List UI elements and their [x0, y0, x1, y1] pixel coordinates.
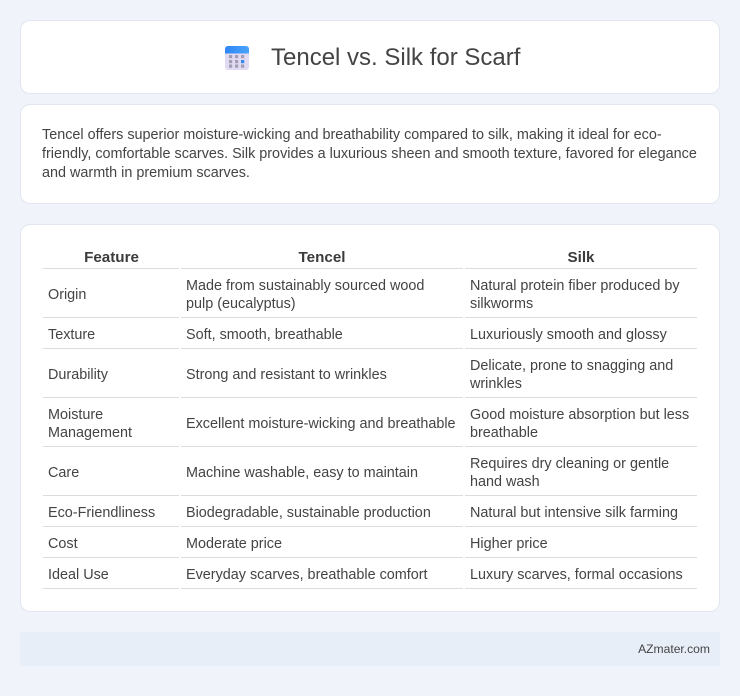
row: Moisture Management: Moisture: [48, 407, 103, 423]
row: Ideal Use: Ideal Use: [48, 567, 109, 583]
column heading: Tencel: Tencel: [298, 249, 346, 266]
row: Origin: Origin: [48, 287, 86, 303]
row: Durability: Durability: [48, 367, 108, 383]
summary text: friendly, comfortable scarves. Silk provides a luxurious sheen and smooth texture, favored for elegance: [42, 146, 697, 162]
title: Tencel vs. Silk for Scarf: [271, 44, 520, 71]
row: Texture: Texture: [48, 327, 95, 343]
text: hand wash: [470, 474, 540, 490]
row: Care: Care: [48, 465, 79, 481]
header panel: [20, 20, 720, 94]
text: Soft, smooth, breathable: [186, 327, 343, 343]
text: Luxury scarves, formal occasions: [470, 567, 683, 583]
summary text: Tencel offers superior moisture-wicking and breathability compared to silk, making it ideal for eco-: [42, 127, 662, 143]
text: Luxuriously smooth and glossy: [470, 327, 667, 343]
icon: calendar: [225, 46, 249, 70]
text: Natural but intensive silk farming: [470, 505, 678, 521]
row: Moisture Management: Management: [48, 425, 132, 441]
text: Moderate price: [186, 536, 282, 552]
text: Strong and resistant to wrinkles: [186, 367, 387, 383]
text: Machine washable, easy to maintain: [186, 465, 418, 481]
text: Delicate, prone to snagging and: [470, 358, 673, 374]
text: breathable: [470, 425, 538, 441]
text: wrinkles: [470, 376, 522, 392]
row: Moisture Management: [48, 407, 132, 441]
footer text: AZmater.com: [638, 642, 710, 656]
column heading: Silk: Silk: [567, 249, 595, 266]
footer bar: [20, 632, 720, 666]
text: silkworms: [470, 296, 533, 312]
summary text: and warmth in premium scarves.: [42, 165, 250, 181]
text: Biodegradable, sustainable production: [186, 505, 431, 521]
text: Good moisture absorption but less: [470, 407, 689, 423]
text: Higher price: [470, 536, 548, 552]
text: Requires dry cleaning or gentle: [470, 456, 669, 472]
row: Cost: Cost: [48, 536, 78, 552]
text: Made from sustainably sourced wood: [186, 278, 424, 294]
text: pulp (eucalyptus): [186, 296, 296, 312]
text: Everyday scarves, breathable comfort: [186, 567, 428, 583]
row: Eco-Friendliness: Eco-Friendliness: [48, 505, 155, 521]
panel: comparison table: [20, 224, 720, 612]
summary text: [42, 127, 697, 181]
comparison table: [43, 249, 697, 589]
text: Natural protein fiber produced by: [470, 278, 680, 294]
column heading: Feature: Feature: [84, 249, 139, 266]
text: Excellent moisture-wicking and breathable: [186, 416, 456, 432]
summary panel: [20, 104, 720, 204]
